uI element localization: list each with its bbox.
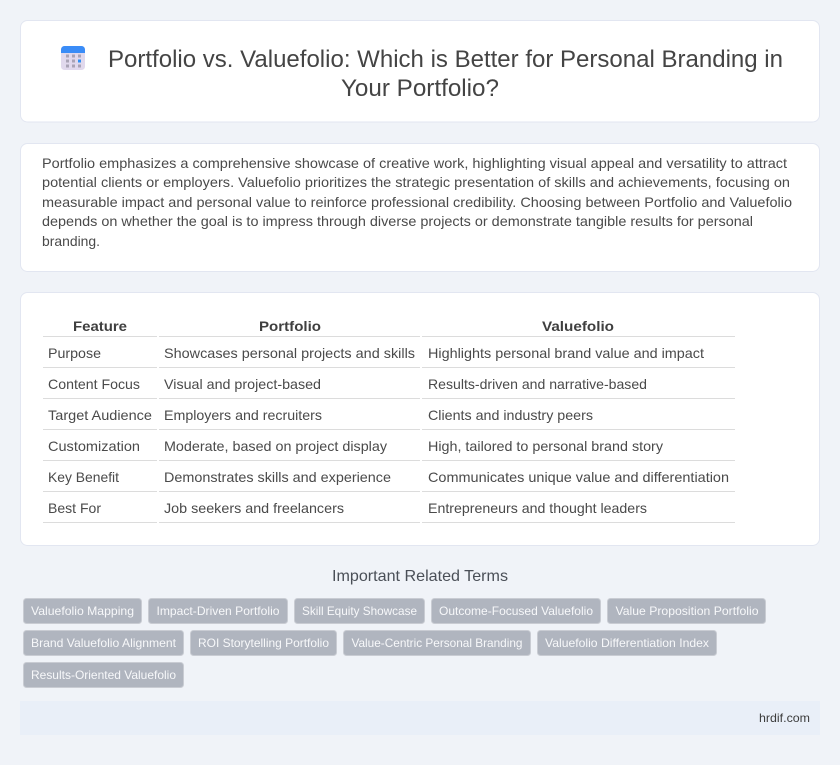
table row: best for: Job seekers and freelancers xyxy=(164,500,344,516)
tag xyxy=(344,630,530,656)
heading: important related terms: Important Related Terms xyxy=(332,568,508,585)
table row: key benefit xyxy=(48,469,729,485)
table header xyxy=(73,318,614,334)
tag: Results-Oriented Valuefolio xyxy=(31,668,176,682)
text block: summary paragraph: Portfolio emphasizes a comprehensive showcase of creative work, highlighting visual appeal and versatility to attract xyxy=(42,155,787,171)
title xyxy=(108,46,783,102)
tag: Impact-Driven Portfolio xyxy=(156,604,280,618)
tag xyxy=(190,630,336,656)
tag: Brand Valuefolio Alignment xyxy=(31,636,177,650)
title: Portfolio vs. Valuefolio: Which is Better for Personal Branding in xyxy=(108,46,783,73)
tag: Valuefolio Mapping xyxy=(31,604,134,618)
tags: related terms xyxy=(24,598,766,688)
table row: best for: Entrepreneurs and thought leaders xyxy=(428,500,647,516)
tag xyxy=(24,630,184,656)
table header: Portfolio xyxy=(259,318,321,334)
title: Your Portfolio? xyxy=(341,75,499,102)
tag xyxy=(608,598,766,624)
table row: key benefit: Demonstrates skills and experience xyxy=(164,469,391,485)
panel: summary xyxy=(20,144,820,272)
tag xyxy=(538,630,716,656)
tag: Valuefolio Differentiation Index xyxy=(545,636,709,650)
tag: Value-Centric Personal Branding xyxy=(352,636,522,650)
icon: calendar xyxy=(61,46,85,70)
table row: purpose: Highlights personal brand value and impact xyxy=(428,345,704,361)
table row: target audience: Clients and industry peers xyxy=(428,407,593,423)
footer: hrdif.com xyxy=(759,711,810,725)
table row: target audience xyxy=(48,407,593,423)
footer xyxy=(20,701,820,735)
table row: key benefit: Communicates unique value and differentiation xyxy=(428,469,729,485)
text block: summary paragraph: depends on whether the goal is to impress through diverse projects or demonstrate tangible results for personal xyxy=(42,213,753,229)
tag xyxy=(148,598,288,624)
table row: content focus: Content Focus xyxy=(48,376,140,392)
text block: summary paragraph: branding. xyxy=(42,233,100,249)
table header: Valuefolio xyxy=(542,318,614,334)
table row: target audience: Employers and recruiters xyxy=(164,407,322,423)
tag: Skill Equity Showcase xyxy=(302,604,417,618)
table row: target audience: Target Audience xyxy=(48,407,152,423)
table row: purpose xyxy=(48,345,704,361)
tag: Outcome-Focused Valuefolio xyxy=(439,604,593,618)
panel: comparison table xyxy=(20,292,820,546)
table row: customization xyxy=(48,438,663,454)
table row: customization: Customization xyxy=(48,438,140,454)
table header: Feature xyxy=(73,318,127,334)
text block: summary paragraph xyxy=(42,155,792,249)
table row: key benefit: Key Benefit xyxy=(48,469,119,485)
table row: customization: Moderate, based on project display xyxy=(164,438,387,454)
table row: best for: Best For xyxy=(48,500,101,516)
table row: content focus: Visual and project-based xyxy=(164,376,321,392)
text block: summary paragraph: potential clients or employers. Valuefolio prioritizes the strategic presentation of skills and achievements, focusing on xyxy=(42,174,790,190)
table row: best for xyxy=(48,500,647,516)
table row: purpose: Purpose xyxy=(48,345,101,361)
tag: Value Proposition Portfolio xyxy=(616,604,759,618)
text block: summary paragraph: measurable impact and personal value to reinforce professional credibility. Choosing between Portfolio and Valuefolio xyxy=(42,194,792,210)
tag xyxy=(432,598,600,624)
tag xyxy=(24,598,142,624)
tag xyxy=(24,662,184,688)
tag xyxy=(294,598,424,624)
tag: ROI Storytelling Portfolio xyxy=(198,636,329,650)
table row: customization: High, tailored to personal brand story xyxy=(428,438,663,454)
table row: purpose: Showcases personal projects and skills xyxy=(164,345,415,361)
panel: title card xyxy=(20,20,820,122)
table row: content focus xyxy=(48,376,647,392)
table row: content focus: Results-driven and narrative-based xyxy=(428,376,647,392)
